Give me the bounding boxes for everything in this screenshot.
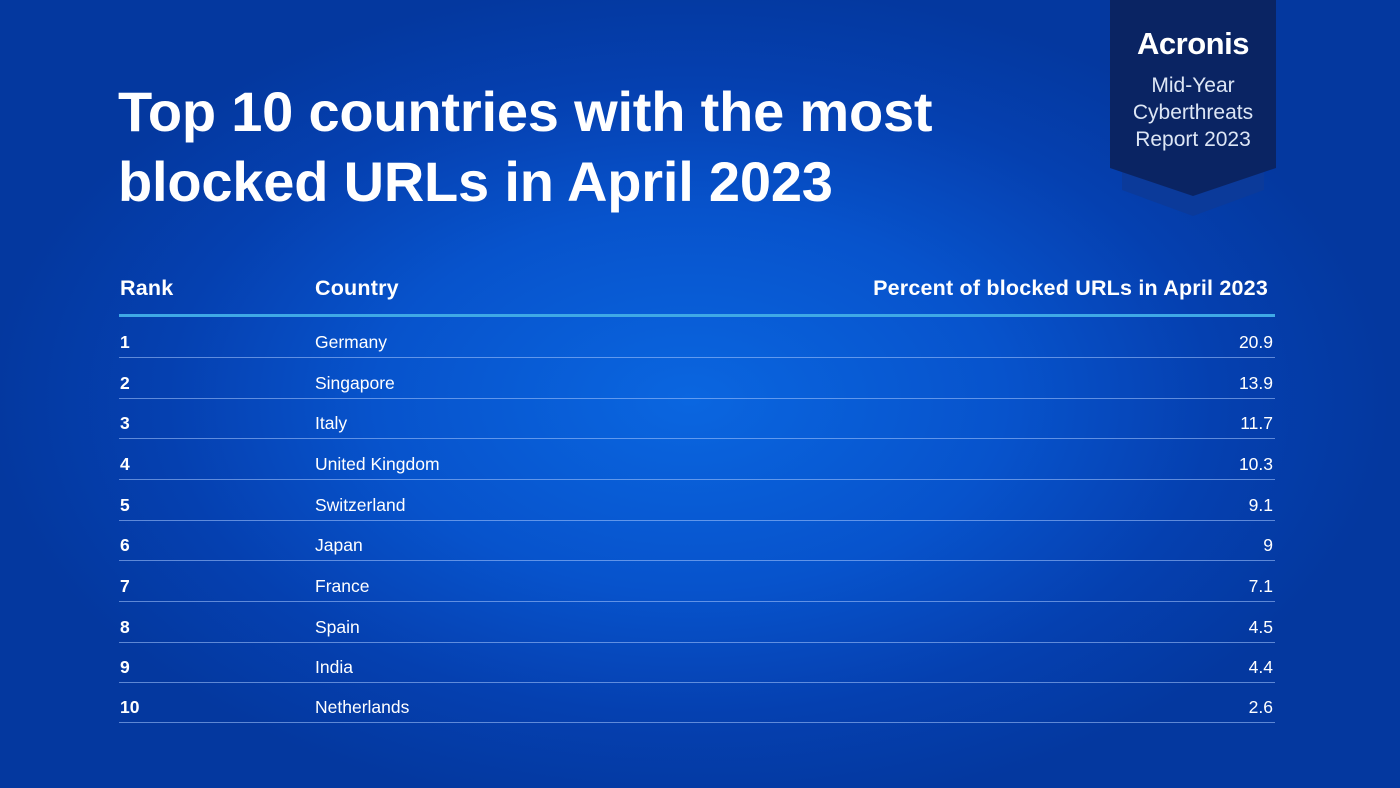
table rows: 13.9 [1239,373,1273,393]
table rows: Switzerland [315,495,405,515]
table rows: 5 [120,495,130,515]
table rows: 10 [120,697,139,717]
table rows: Italy [315,413,347,433]
table rows: 2.6 [1249,697,1273,717]
table header: Country [315,276,399,300]
table rows: 4 [120,454,130,474]
table rows: Spain [315,617,360,637]
table rows: 8 [120,617,130,637]
table rows: 7 [120,576,130,596]
badge: Acronis report [1110,0,1276,216]
table rows: France [315,576,369,596]
badge: Acronis report: Mid-Year [1151,74,1235,97]
table rows: Singapore [315,373,395,393]
table rows: 9 [120,657,130,677]
title [118,80,932,213]
badge: Acronis report: Report 2023 [1135,128,1251,151]
table rows: 4.5 [1249,617,1273,637]
table header: Rank [120,276,173,300]
table header: Percent of blocked URLs in April 2023 [873,276,1268,300]
table rows: 9.1 [1249,495,1273,515]
table rows: Japan [315,535,363,555]
table rows: 2 [120,373,130,393]
table rows: 11.7 [1240,413,1273,433]
table header [119,276,1275,317]
badge: Acronis report: Cyberthreats [1133,101,1253,124]
table rows: India [315,657,353,677]
table rows: 7.1 [1249,576,1273,596]
table rows: 3 [120,413,130,433]
table rows: 10.3 [1239,454,1273,474]
title: Top 10 countries with the most [118,80,932,143]
table rows: 1 [120,332,130,352]
table rows: United Kingdom [315,454,440,474]
table rows [119,332,1275,723]
table rows: 9 [1263,535,1273,555]
table rows: 4.4 [1249,657,1273,677]
table rows: 6 [120,535,130,555]
table rows: Germany [315,332,387,352]
table rows: Netherlands [315,697,409,717]
table rows: 20.9 [1239,332,1273,352]
title: blocked URLs in April 2023 [118,150,833,213]
badge: Acronis report: Acronis [1137,26,1249,61]
